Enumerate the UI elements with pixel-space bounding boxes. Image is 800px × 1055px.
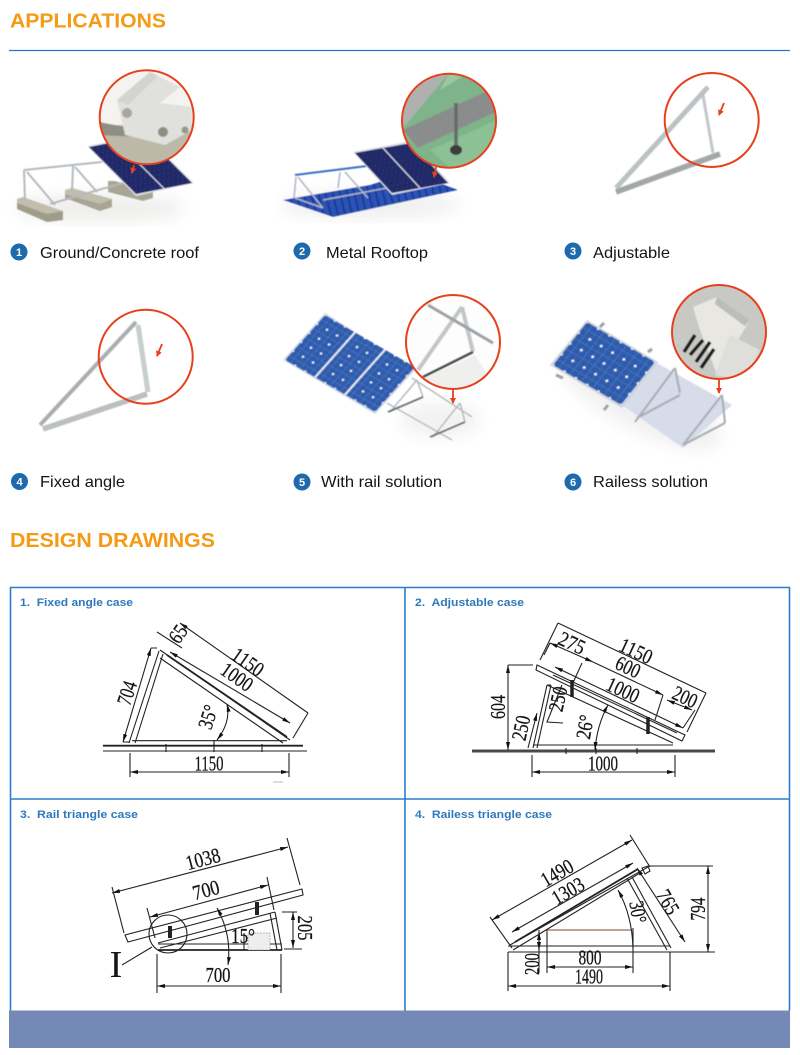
label: Ground/Concrete roof xyxy=(40,245,200,262)
label: Railess solution xyxy=(593,474,708,491)
drawing: fixed angle dimensions: 65 xyxy=(163,620,193,648)
drawing: adjustable dimensions: 604 xyxy=(486,695,510,719)
illustration: ground mount with concrete blocks xyxy=(15,135,194,222)
drawing: rail triangle dimensions: 1038 xyxy=(183,843,223,875)
illustration: fixed triangle xyxy=(40,322,148,429)
panel: application 4 fixed angle xyxy=(11,310,193,491)
panel: rail triangle case xyxy=(20,809,317,993)
drawing: rail triangle dimensions: 15° xyxy=(231,924,255,948)
detail circle: base bracket xyxy=(99,70,195,173)
heading: design drawings: DESIGN DRAWINGS xyxy=(10,530,215,552)
label: Metal Rooftop xyxy=(326,245,428,262)
drawing: railless triangle dimensions: 765 xyxy=(651,885,685,919)
badge 5: 5 xyxy=(299,477,305,489)
panel: application 6 railless solution xyxy=(546,283,768,491)
drawing: adjustable dimensions: 250 xyxy=(507,713,535,743)
drawing: railless triangle dimensions: 794 xyxy=(686,897,710,920)
drawing: railless triangle dimensions: 200 xyxy=(520,953,544,975)
drawing: adjustable dimensions: 1000 xyxy=(603,672,643,708)
drawing: adjustable dimensions: 1150 xyxy=(616,633,656,669)
drawing: fixed angle dimensions xyxy=(103,620,308,782)
detail circle xyxy=(99,310,193,404)
badge 4 xyxy=(11,473,28,490)
drawing: fixed angle dimensions: 704 xyxy=(112,678,142,708)
badge 5 xyxy=(294,474,310,490)
heading: applications: APPLICATIONS xyxy=(10,10,166,32)
illustration: metal roof mount xyxy=(280,141,460,219)
detail circle: roof standoff bolt xyxy=(401,72,500,177)
drawing: rail triangle dimensions: 205 xyxy=(293,916,317,940)
arrow xyxy=(157,344,162,356)
label: Fixed angle xyxy=(40,474,125,491)
detail circle: triangle and rail xyxy=(406,295,500,403)
drawing: adjustable dimensions: 1000 xyxy=(588,752,618,776)
label: Adjustable xyxy=(593,245,670,262)
footer band xyxy=(9,1010,790,1048)
drawing: railless triangle dimensions: 800 xyxy=(578,946,602,970)
panel: application 3 adjustable xyxy=(564,73,759,262)
badge 6: 6 xyxy=(570,477,576,489)
drawing: railless triangle dimensions: 1303 xyxy=(547,872,589,910)
detail circle xyxy=(665,73,759,167)
panel: adjustable case xyxy=(415,597,715,777)
detail circle: clamp xyxy=(670,283,768,393)
drawing: fixed angle dimensions: 35° xyxy=(193,702,223,732)
drawing: adjustable dimensions: 26° xyxy=(571,713,599,741)
drawing: fixed angle dimensions: 1150 xyxy=(194,752,224,776)
drawing: railless triangle dimensions: 30° xyxy=(624,899,652,925)
drawing: railless triangle dimensions xyxy=(490,835,715,991)
drawing: rail triangle dimensions: I xyxy=(110,944,122,986)
drawing: adjustable dimensions: 200 xyxy=(669,681,701,713)
drawing: adjustable dimensions: 600 xyxy=(612,651,644,683)
illustration: railless panel xyxy=(546,320,734,469)
illustration: adjustable triangle xyxy=(616,87,720,192)
panel: fixed angle case xyxy=(20,597,308,782)
title: 3. Rail triangle case xyxy=(20,809,138,821)
label: With rail solution xyxy=(321,474,442,491)
badge 3: 3 xyxy=(570,246,576,258)
drawing: fixed angle dimensions: 1150 xyxy=(227,642,269,682)
panel frame: design drawings grid xyxy=(10,588,790,1010)
title: 4. Railess triangle case xyxy=(415,809,552,821)
drawing: fixed angle dimensions: 1000 xyxy=(216,657,258,697)
drawing: rail triangle dimensions: 700 xyxy=(206,963,230,987)
drawing: rail triangle dimensions: 700 xyxy=(190,875,222,905)
badge 4: 4 xyxy=(16,476,23,488)
badge 6 xyxy=(564,474,582,490)
panel: railless triangle case xyxy=(415,809,715,991)
badge 1 xyxy=(10,244,28,260)
illustration: solar array on rails xyxy=(283,313,480,440)
drawing: adjustable dimensions: 250 xyxy=(544,684,572,714)
drawing: railless triangle dimensions: 1490 xyxy=(536,854,578,892)
drawing: rail triangle dimensions xyxy=(110,838,317,993)
panel: application 1 ground/concrete roof xyxy=(10,70,200,262)
panel: application 5 with rail solution xyxy=(283,295,500,491)
drawing: railless triangle dimensions: 1490 xyxy=(575,964,603,988)
badge 3 xyxy=(564,242,582,260)
badge 1: 1 xyxy=(16,247,22,259)
badge 2 xyxy=(294,242,310,260)
panel: application 2 metal rooftop xyxy=(280,72,500,262)
title: 2. Adjustable case xyxy=(415,597,524,609)
drawing: adjustable dimensions: 275 xyxy=(555,626,589,660)
badge 2: 2 xyxy=(299,246,305,258)
title: 1. Fixed angle case xyxy=(20,597,133,609)
drawing: adjustable dimensions xyxy=(472,623,715,777)
arrow xyxy=(719,103,724,115)
